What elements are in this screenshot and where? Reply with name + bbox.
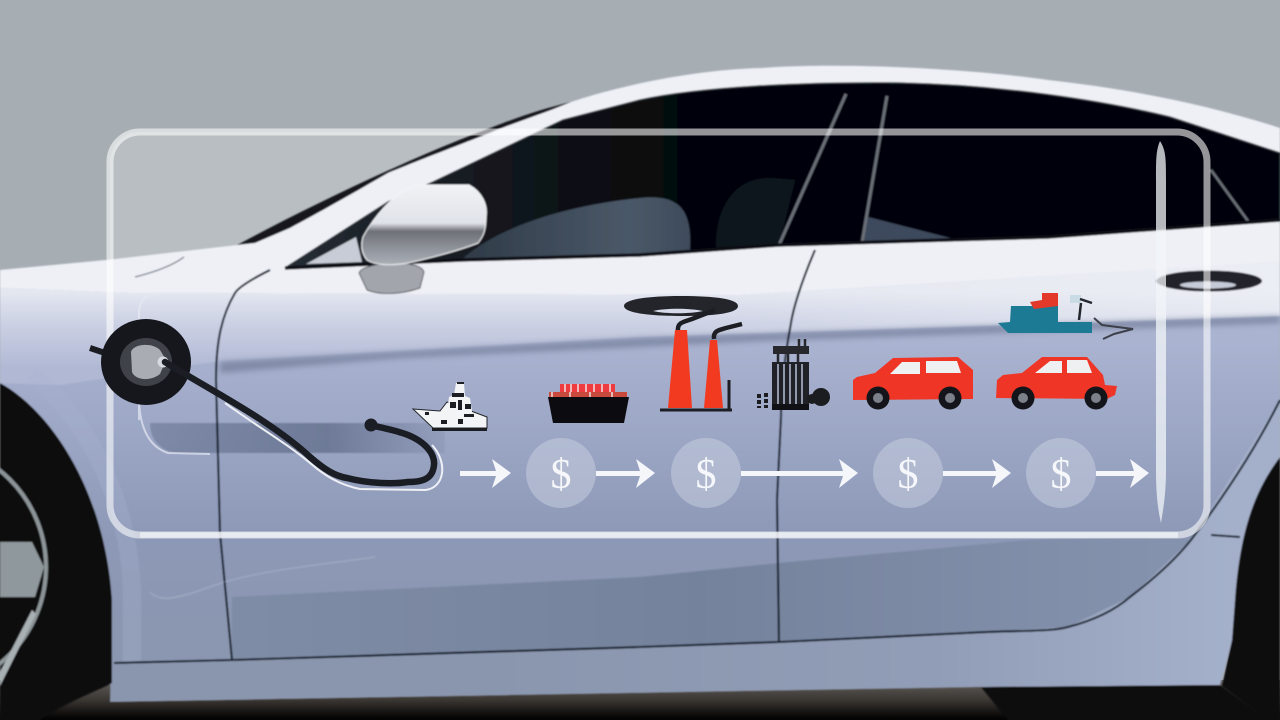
wing mirror bbox=[359, 185, 486, 294]
shoulder wedge above crease bbox=[0, 262, 1280, 385]
rear quarter and sill bbox=[110, 400, 1280, 702]
plug bbox=[131, 345, 166, 379]
frame inner bar bbox=[1156, 141, 1166, 523]
lower door shadow panel bbox=[232, 536, 1191, 660]
chimney pipes bbox=[678, 310, 742, 339]
coin 4 bbox=[1026, 438, 1096, 508]
side windows bbox=[285, 83, 1280, 268]
left tyre bbox=[0, 383, 112, 720]
cable recess shadow bbox=[150, 423, 445, 453]
floor bbox=[0, 680, 1280, 720]
right wheel bbox=[1222, 457, 1280, 720]
icon: factory chimneys bbox=[624, 296, 742, 410]
ship wake bbox=[1094, 318, 1133, 339]
left wheel spokes bbox=[0, 542, 44, 597]
smoke ring bbox=[624, 296, 738, 316]
quarter glass reflection bbox=[306, 237, 362, 264]
windshield sliver bbox=[237, 102, 571, 245]
coin 2 bbox=[671, 438, 741, 508]
coin 1 bbox=[526, 438, 596, 508]
cable bbox=[165, 362, 434, 483]
icon: red car 1 bbox=[853, 357, 973, 410]
coin 1: $ bbox=[550, 452, 572, 498]
dollar coins bbox=[526, 438, 1096, 508]
right side shoulder highlight bbox=[650, 262, 1280, 337]
icon: battery raw materials tray bbox=[548, 384, 629, 423]
coin 4: $ bbox=[1050, 452, 1072, 498]
arrow 1 bbox=[460, 459, 511, 488]
inner recess outline bbox=[139, 293, 215, 454]
body scratch highlight bbox=[150, 557, 375, 598]
left rim bbox=[0, 443, 46, 691]
cable plug end bbox=[364, 418, 378, 432]
chimney left bbox=[668, 330, 692, 408]
cable outline bbox=[225, 403, 442, 490]
arrow 2 bbox=[596, 459, 655, 488]
frame bottom highlight bbox=[140, 532, 1178, 538]
icon: red car 2 bbox=[996, 357, 1117, 410]
underbody shadow bbox=[981, 685, 1268, 720]
arrow 3 bbox=[741, 459, 858, 488]
left wheel bbox=[0, 383, 112, 720]
chimney right bbox=[704, 340, 723, 408]
coin 3 bbox=[873, 438, 943, 508]
arrows bbox=[460, 459, 1149, 488]
door lines bbox=[114, 250, 1280, 663]
crease shadow bbox=[220, 316, 1280, 373]
wheel arch lip bbox=[30, 375, 132, 662]
charging port and cable bbox=[90, 319, 442, 490]
arrow 5 bbox=[1096, 459, 1149, 488]
interior seats bbox=[461, 178, 958, 260]
door handle bbox=[1156, 270, 1262, 292]
hood shut line bbox=[135, 257, 184, 277]
glass panel tint over the wall bbox=[110, 132, 1207, 535]
coin 2: $ bbox=[696, 452, 716, 498]
icon: blue cargo ship bbox=[998, 293, 1133, 339]
upper white shoulder bbox=[0, 66, 1280, 295]
port ring bbox=[101, 319, 191, 405]
coin 3: $ bbox=[898, 452, 918, 498]
icon: naval ship bbox=[413, 382, 487, 431]
window pillars bbox=[779, 94, 1248, 245]
arrow 4 bbox=[943, 459, 1011, 488]
port bracket bbox=[90, 348, 108, 354]
belt line bbox=[285, 220, 1280, 268]
factory base bbox=[660, 380, 732, 410]
icon: battery assembly plant bbox=[759, 339, 830, 410]
glass overlay frame bbox=[110, 132, 1207, 535]
